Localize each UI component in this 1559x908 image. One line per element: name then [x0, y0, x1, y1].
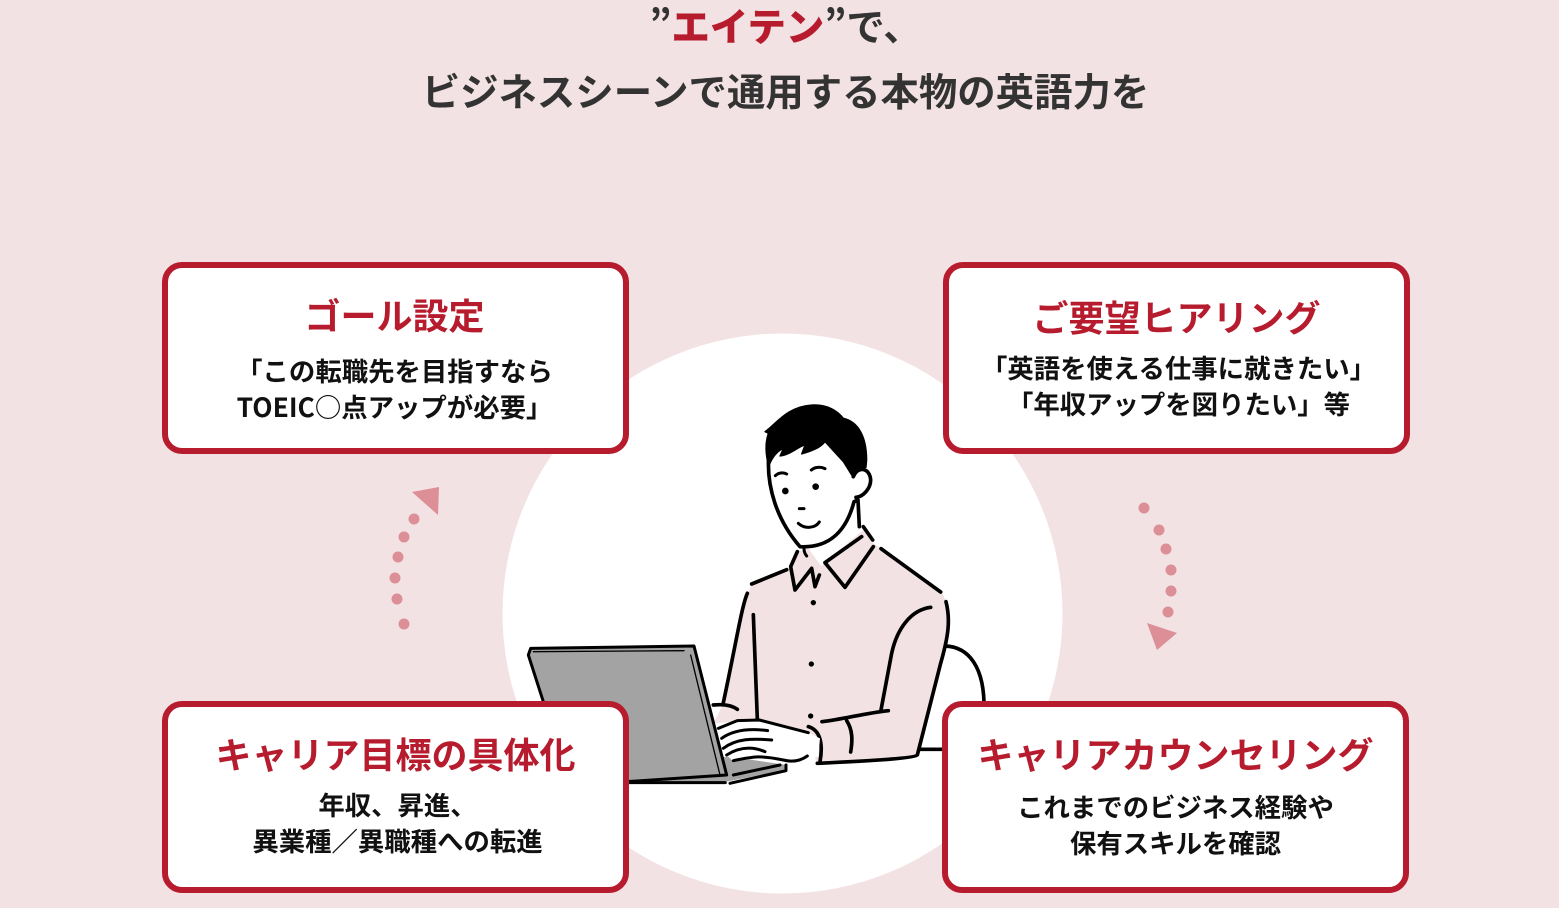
panel: career counseling [942, 701, 1409, 893]
shirt [713, 530, 948, 763]
eyebrows, eyes, nose, mouth [775, 467, 825, 556]
text: goal setting: TOEIC○点アップが必要」 [237, 386, 552, 425]
heading: needs hearing: ご要望ヒアリング [1032, 290, 1320, 342]
person with laptop [528, 405, 984, 783]
text: goal setting: 「この転職先を目指すなら [236, 350, 553, 389]
text: needs hearing: 「英語を使える仕事に就きたい」 [981, 347, 1376, 386]
text: needs hearing: 「年収アップを図りたい」等 [1007, 383, 1350, 422]
collar [791, 548, 822, 590]
text: needs hearing [981, 347, 1376, 422]
text: career counseling: これまでのビジネス経験や [1017, 786, 1334, 825]
title [422, 0, 1149, 118]
chair [918, 646, 984, 749]
panel: career goal [162, 701, 629, 893]
text: career goal: 異業種／異職種への転進 [252, 820, 543, 859]
laptop screen [528, 646, 727, 782]
laptop base [627, 757, 787, 782]
text: career goal [252, 784, 543, 859]
arrow: left, pointing up [390, 487, 439, 630]
buttons [811, 600, 816, 605]
hand [718, 720, 820, 762]
panel: goal setting [162, 262, 629, 454]
text: career counseling [1017, 786, 1334, 861]
shirt outlines [713, 549, 948, 763]
heading: career counseling: キャリアカウンセリング [977, 727, 1374, 779]
arrow: right, pointing down [1138, 502, 1177, 650]
title line 2: ビジネスシーンで通用する本物の英語力を [422, 62, 1149, 118]
text: career counseling: 保有スキルを確認 [1070, 822, 1281, 861]
hair [765, 405, 867, 477]
text: career goal: 年収、昇進、 [318, 784, 477, 823]
face [768, 457, 859, 547]
heading: goal setting: ゴール設定 [304, 288, 484, 340]
white circle backdrop [502, 334, 1062, 894]
panel: needs hearing [943, 262, 1410, 454]
ear [853, 469, 871, 497]
heading: career goal: キャリア目標の具体化 [215, 727, 576, 779]
text: goal setting [236, 350, 553, 425]
